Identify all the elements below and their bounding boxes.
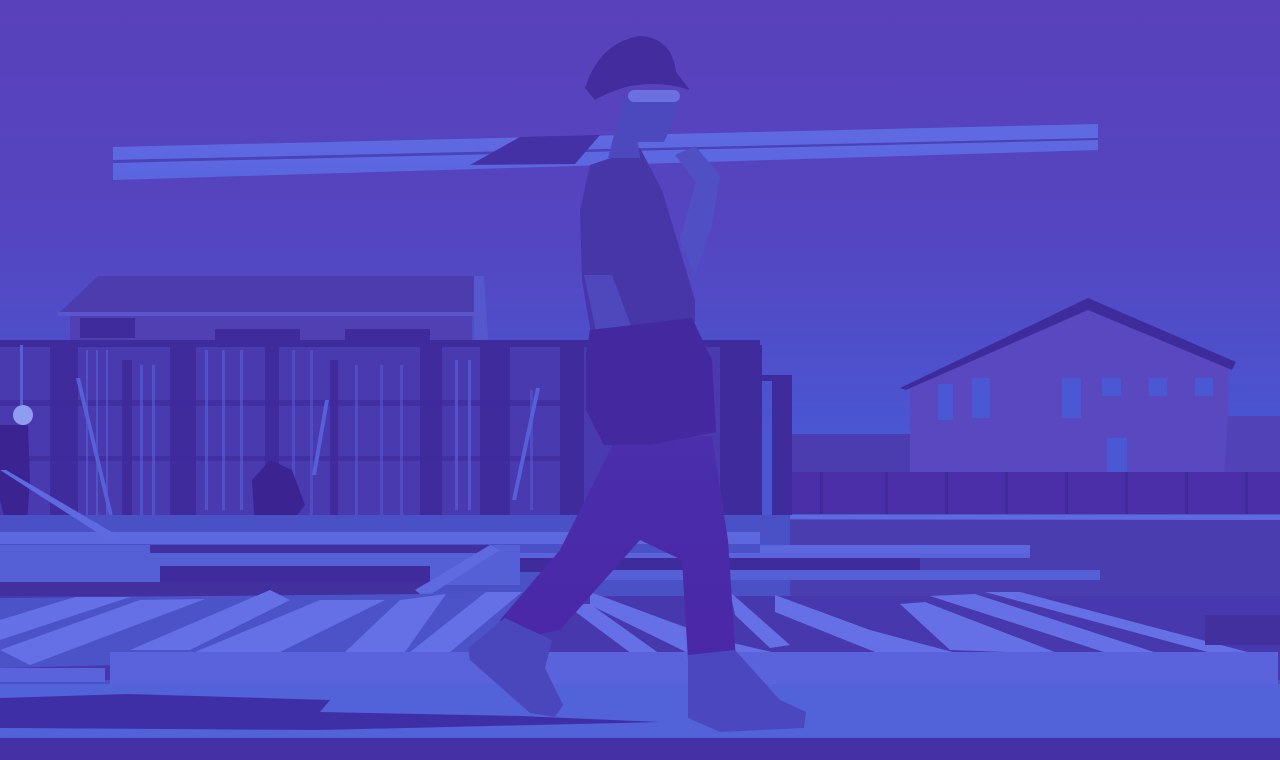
hard hat — [585, 36, 690, 100]
ground — [0, 515, 1280, 685]
legs — [500, 436, 736, 660]
timber wall framing — [0, 340, 792, 540]
safety glasses — [628, 90, 680, 102]
neck and face — [608, 90, 678, 158]
lower arm — [584, 275, 708, 405]
house on the right — [790, 298, 1280, 514]
raised arm — [675, 146, 720, 275]
shirt torso — [580, 148, 695, 340]
tool belt — [586, 318, 716, 445]
long front beam — [110, 652, 1278, 686]
lumber plank on shoulder — [113, 124, 1098, 180]
floor joist platform — [0, 470, 1280, 680]
worker at far left — [0, 405, 33, 540]
right boot — [688, 650, 806, 732]
house behind framing — [58, 276, 488, 376]
crouching worker in the framing — [252, 460, 305, 530]
worker — [468, 36, 806, 732]
left boot — [468, 618, 563, 717]
foreground concrete slab — [0, 668, 1280, 760]
